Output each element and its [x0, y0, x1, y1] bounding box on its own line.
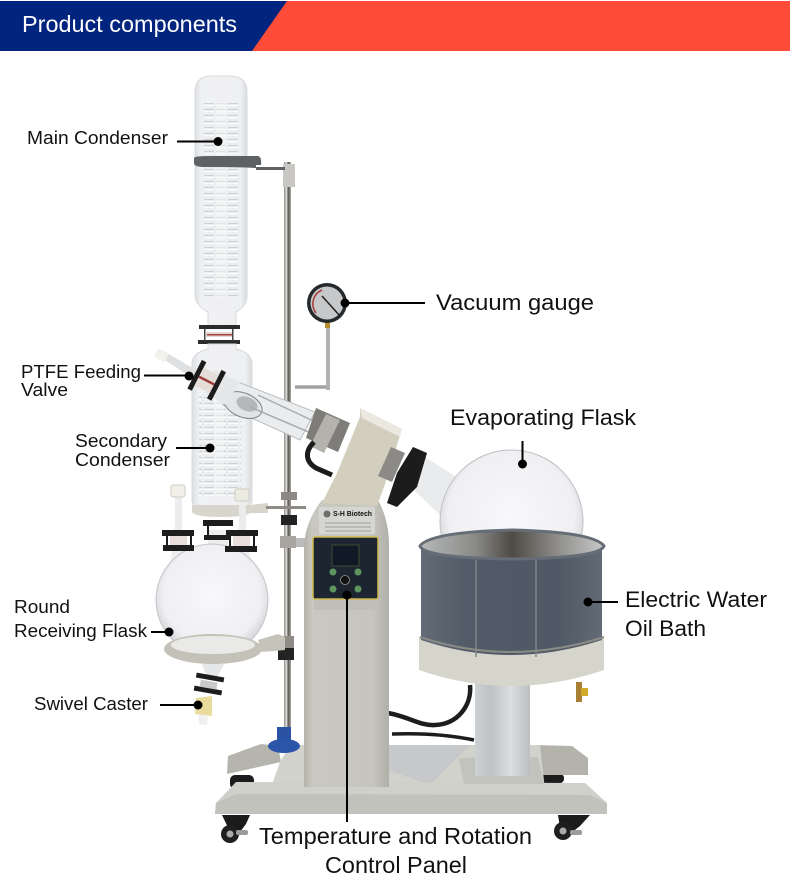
label: electric water oil bath: Oil Bath	[625, 616, 706, 641]
label: temperature and rotation control panel: Control Panel	[325, 852, 467, 878]
support rod	[278, 162, 306, 737]
header banner	[0, 1, 790, 51]
condenser coil	[202, 103, 240, 296]
valve stem	[157, 350, 196, 378]
receiving tray	[164, 634, 262, 664]
secondary glass body	[192, 344, 252, 506]
rear left foot	[227, 744, 281, 774]
bottom valve	[194, 664, 224, 725]
brand plate	[319, 507, 375, 534]
flask neck	[414, 454, 455, 515]
bath support post	[459, 680, 544, 784]
evaporating flask	[414, 450, 583, 593]
bath body	[421, 548, 602, 655]
base frame	[215, 727, 607, 843]
flask sphere	[440, 450, 583, 593]
label: electric water oil bath	[584, 587, 767, 641]
label: evaporating flask: Evaporating Flask	[450, 405, 637, 430]
label: PTFE feeding valve: PTFE Feeding	[21, 362, 141, 382]
label: secondary condenser: Condenser	[75, 450, 170, 470]
secondary base collar	[192, 503, 268, 517]
flask stems	[175, 497, 182, 531]
upper clamp ring and arm	[194, 156, 285, 170]
valve clamp	[187, 360, 226, 401]
inner steel bowl	[421, 530, 603, 559]
brand plate: S-H Biotech	[333, 509, 372, 518]
bath rim	[420, 530, 604, 559]
label: round receiving flask: Receiving Flask	[14, 621, 148, 641]
main control column	[304, 408, 402, 787]
inclined glass tube	[223, 382, 315, 440]
control panel	[313, 537, 378, 599]
label: swivel caster	[34, 694, 202, 714]
blue rod flange	[268, 727, 300, 753]
gauge stem	[295, 340, 328, 387]
gauge dial	[307, 283, 347, 323]
label: PTFE feeding valve	[21, 362, 194, 400]
label: secondary condenser: Secondary	[75, 431, 167, 451]
label: round receiving flask: Round	[14, 597, 70, 617]
bath base ring	[419, 637, 604, 686]
drain valve	[576, 682, 588, 702]
label: vacuum gauge	[340, 290, 594, 315]
label: swivel caster: Swivel Caster	[34, 694, 148, 714]
rotary joint tube	[220, 382, 350, 475]
rotary seal nut	[378, 447, 427, 507]
main condenser	[194, 76, 285, 344]
label: temperature and rotation control panel: Temperature and Rotation	[259, 823, 532, 849]
rotating head	[322, 408, 402, 506]
label: main condenser: Main Condenser	[27, 128, 168, 148]
neck clamps	[198, 325, 240, 344]
secondary coil	[199, 392, 241, 496]
condenser glass body	[195, 76, 247, 326]
water oil bath	[419, 530, 604, 702]
rear caster left	[230, 775, 254, 789]
label: evaporating flask	[450, 405, 637, 468]
label: electric water oil bath: Electric Water	[625, 587, 767, 612]
rear right foot	[533, 745, 588, 775]
label: vacuum gauge: Vacuum gauge	[436, 290, 594, 315]
front rail	[215, 782, 607, 814]
center plate	[270, 745, 545, 790]
label: secondary condenser	[75, 431, 214, 470]
title: Product components	[22, 11, 237, 37]
secondary condenser	[192, 344, 306, 517]
banner blue section	[0, 1, 287, 51]
receiving flask sphere	[156, 544, 268, 656]
feeding valve assembly	[154, 349, 240, 405]
valve neck to tube	[205, 370, 240, 405]
cables	[388, 685, 474, 740]
vacuum gauge	[295, 283, 347, 390]
flask clamps	[162, 520, 258, 552]
flask necks	[170, 548, 190, 575]
receiving flask assembly	[156, 485, 285, 725]
label: temperature and rotation control panel	[259, 590, 532, 878]
front caster left	[221, 815, 250, 843]
front caster right	[554, 815, 590, 840]
label: round receiving flask	[14, 597, 174, 641]
flask caps	[171, 485, 185, 497]
column body	[304, 500, 389, 787]
inner capsule	[234, 393, 260, 415]
rear caster right	[540, 774, 564, 783]
gauge needle	[322, 296, 340, 316]
vapour hose	[307, 442, 332, 475]
label: main condenser	[27, 128, 222, 148]
banner red section	[0, 1, 790, 51]
label: PTFE feeding valve: Valve	[21, 380, 68, 400]
metal coupling	[306, 408, 350, 452]
